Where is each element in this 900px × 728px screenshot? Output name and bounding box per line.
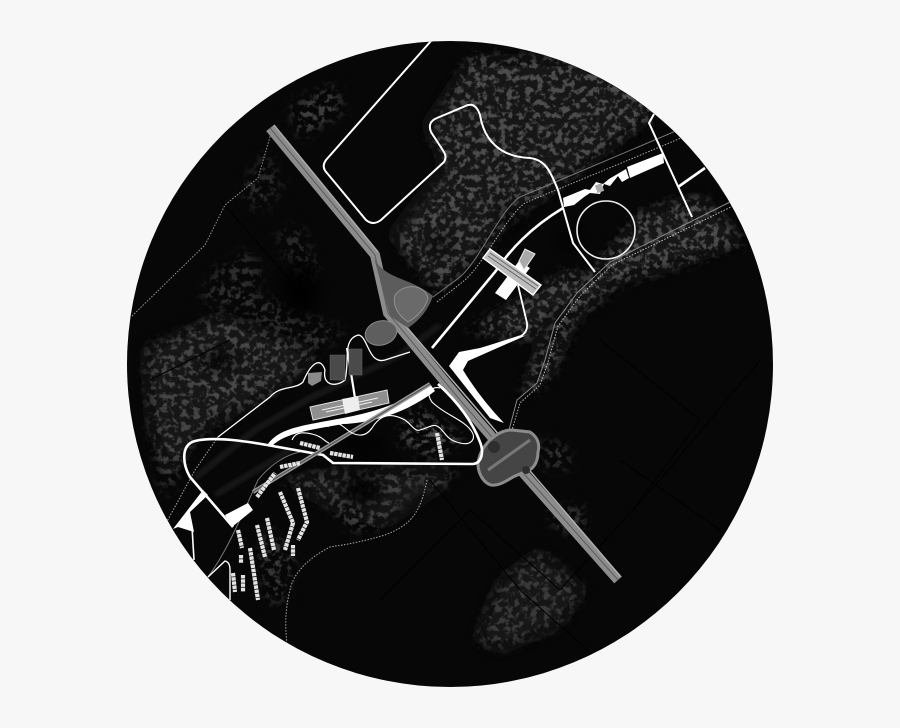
right double line bbox=[509, 202, 733, 430]
white triangle bbox=[225, 503, 253, 527]
left white shape bbox=[173, 490, 208, 532]
highway bbox=[270, 125, 621, 580]
line from bridge bbox=[479, 285, 528, 348]
dark road network bbox=[150, 340, 592, 654]
rail line lower bbox=[207, 452, 300, 578]
white building band bbox=[563, 153, 664, 207]
cross-shaped bridge bbox=[483, 249, 541, 300]
closed white path and link bbox=[324, 41, 595, 272]
circular site plan map bbox=[127, 41, 773, 687]
tree shadows bbox=[200, 207, 582, 506]
curly paths bbox=[292, 388, 474, 444]
vegetation glow bbox=[145, 60, 745, 650]
main white road bbox=[432, 208, 563, 348]
white wedge bbox=[449, 335, 527, 423]
circle path bbox=[577, 201, 635, 259]
sports fields bbox=[330, 349, 362, 380]
left thin white line bbox=[192, 527, 194, 560]
thick curved road bbox=[268, 384, 435, 446]
upper interchange bbox=[374, 258, 433, 328]
rail line bbox=[253, 384, 430, 492]
lower curl line bbox=[208, 561, 230, 600]
map content bbox=[132, 41, 760, 670]
thin grey paths bbox=[132, 125, 733, 645]
vegetation texture bbox=[145, 55, 745, 650]
station building bbox=[310, 390, 389, 420]
roundabout bbox=[478, 430, 539, 485]
map disc bbox=[127, 41, 773, 687]
right white lines bbox=[649, 114, 692, 217]
housing rows bbox=[233, 433, 442, 600]
right white branch bbox=[678, 168, 705, 187]
upper-left dotted line bbox=[132, 130, 272, 316]
river bank stripes bbox=[195, 325, 440, 495]
left dotted line bbox=[165, 437, 218, 525]
lower dotted line bbox=[286, 480, 427, 645]
lower road loop bbox=[184, 384, 482, 527]
thin winding path bbox=[218, 335, 410, 437]
link to station bbox=[347, 348, 355, 398]
small plaza bbox=[308, 372, 322, 386]
interchange oval bbox=[364, 320, 398, 346]
upper double line bbox=[433, 125, 695, 302]
